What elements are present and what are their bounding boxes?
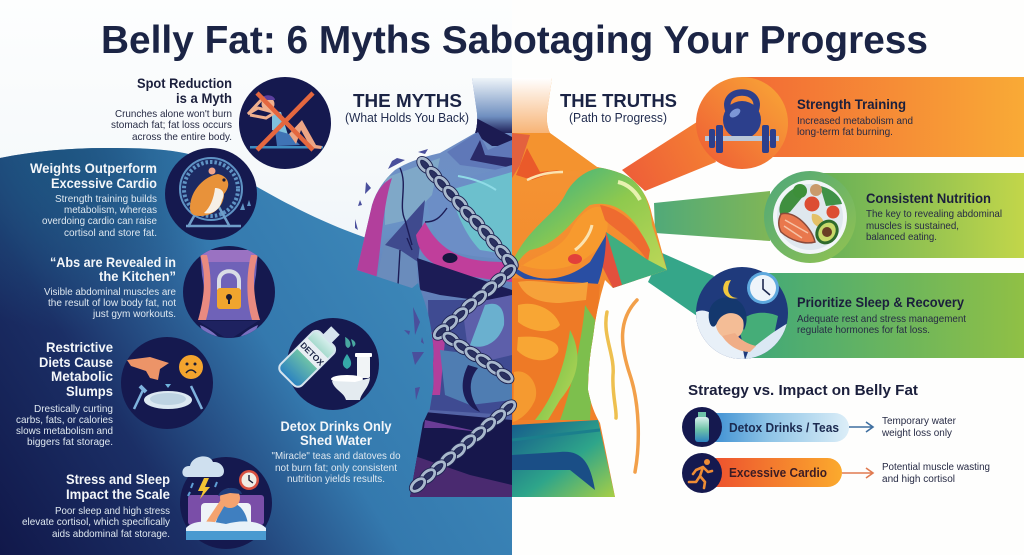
heading: the truths xyxy=(560,90,677,125)
heading: the myths: (What Holds You Back) xyxy=(345,111,469,125)
text: stress and sleep: elevate cortisol, which specifically xyxy=(22,517,171,528)
row: excessive cardio xyxy=(682,453,990,493)
icon: sleeping woman xyxy=(696,267,790,360)
torso: truths half xyxy=(512,78,672,503)
text: weights vs cardio: overdoing cardio can raise xyxy=(42,216,157,227)
text: sleep and recovery xyxy=(797,314,966,336)
icon: detox bottle and toilet xyxy=(277,318,379,410)
heading: the truths: (Path to Progress) xyxy=(569,111,667,125)
text: cardio impact: Potential muscle wasting xyxy=(882,462,990,473)
text: abs in the kitchen: “Abs are Revealed in xyxy=(50,254,176,270)
text: abs in the kitchen: Visible abdominal muscles are xyxy=(44,287,176,298)
heading: consistent nutrition: Consistent Nutrition xyxy=(866,190,991,206)
torso: myths half xyxy=(350,70,515,500)
panel: abs in the kitchen xyxy=(44,246,275,342)
label: excessive cardio: Excessive Cardio xyxy=(729,466,827,480)
text: restrictive diets: Drestically curting xyxy=(34,404,113,415)
text: spot reduction xyxy=(111,75,232,143)
text: strength training: long-term fat burning. xyxy=(797,127,893,138)
text: restrictive diets: Metabolic xyxy=(51,368,113,384)
background: myths side xyxy=(0,0,512,555)
text: cardio impact: and high cortisol xyxy=(882,474,955,485)
ray: strength training xyxy=(622,120,716,191)
icon: energy ribbons xyxy=(606,300,638,472)
text: detox impact xyxy=(881,416,957,439)
icon: shards breaking from torso xyxy=(355,149,428,400)
arrow: detox impact xyxy=(849,422,873,432)
text: stress and sleep: aids abdominal fat storage. xyxy=(52,529,170,540)
text: detox impact: weight loss only xyxy=(881,428,952,439)
icon: empty plate xyxy=(121,337,213,429)
ray: sleep and recovery xyxy=(648,253,714,316)
text: consistent nutrition xyxy=(866,209,1002,243)
text: weights vs cardio: Strength training builds xyxy=(55,194,157,205)
text: detox drinks: Detox Drinks Only xyxy=(280,418,392,434)
row: detox drinks and teas xyxy=(682,407,957,447)
icon: detox bottle and toilet: DETOX xyxy=(298,340,326,368)
text: abs in the kitchen xyxy=(44,254,176,320)
text: weights vs cardio: metabolism, whereas xyxy=(64,205,157,216)
text: restrictive diets: Diets Cause xyxy=(39,354,113,370)
panel: detox drinks xyxy=(272,318,401,485)
text: strength training xyxy=(797,116,913,138)
panel: sleep and recovery xyxy=(696,267,1024,360)
text: abs in the kitchen: just gym workouts. xyxy=(92,309,176,320)
icon: chains xyxy=(409,156,519,494)
title: Belly Fat: 6 Myths Sabotaging Your Progress xyxy=(101,19,928,62)
heading: the myths: THE MYTHS xyxy=(353,90,462,111)
icon: bottle xyxy=(682,407,722,447)
panel: strength training xyxy=(696,77,1024,169)
text: restrictive diets: biggers fat storage. xyxy=(27,437,113,448)
text: restrictive diets xyxy=(16,339,113,448)
icon: crossed-out crunches xyxy=(239,77,331,169)
heading: strength training: Strength Training xyxy=(797,96,906,112)
text: spot reduction: Spot Reduction xyxy=(137,75,232,91)
text: weights vs cardio: cortisol and store fat. xyxy=(64,228,157,239)
text: detox drinks: not burn fat; only consistent xyxy=(275,463,397,474)
icon: kettlebell and barbell xyxy=(696,77,788,169)
text: detox impact: Temporary water xyxy=(882,416,957,427)
text: abs in the kitchen: the result of low body fat, not xyxy=(48,298,176,309)
text: restrictive diets: Restrictive xyxy=(46,339,113,355)
text: spot reduction: Crunches alone won't burn xyxy=(115,109,232,120)
heading: the myths xyxy=(345,90,469,125)
text: restrictive diets: carbs, fats, or calories xyxy=(16,415,113,426)
icon: locked abs xyxy=(183,246,275,342)
text: consistent nutrition: The key to revealing abdominal xyxy=(866,209,1002,220)
icon: hamster wheel xyxy=(165,148,257,240)
text: detox drinks: "Miracle" teas and datoves do xyxy=(272,451,401,462)
text: spot reduction: is a Myth xyxy=(176,90,232,106)
text: weights vs cardio xyxy=(30,160,157,239)
text: stress and sleep: Poor sleep and high stress xyxy=(55,506,170,517)
text: restrictive diets: slows metabolism and xyxy=(16,426,113,437)
panel: weights vs cardio xyxy=(30,148,257,240)
icon: balanced plate xyxy=(764,171,856,263)
panel: consistent nutrition xyxy=(764,171,1024,263)
text: sleep and recovery: regulate hormones for fat loss. xyxy=(797,325,930,336)
background: truths side xyxy=(512,0,1024,555)
text: detox drinks: Shed Water xyxy=(300,432,373,448)
label: detox drinks and teas: Detox Drinks / Teas xyxy=(729,421,839,435)
text: strength training: Increased metabolism and xyxy=(797,116,913,127)
text: stress and sleep: Stress and Sleep xyxy=(66,471,170,487)
ray: consistent nutrition xyxy=(654,191,770,241)
text: abs in the kitchen: the Kitchen” xyxy=(99,268,176,284)
heading: sleep and recovery: Prioritize Sleep & Recovery xyxy=(797,294,964,310)
text: restrictive diets: Slumps xyxy=(66,383,113,399)
text: spot reduction: stomach fat; fat loss occurs xyxy=(111,120,232,131)
text: cardio impact xyxy=(882,462,990,485)
icon: runner xyxy=(682,453,722,493)
heading: the truths: THE TRUTHS xyxy=(560,90,677,111)
text: consistent nutrition: balanced eating. xyxy=(866,232,937,243)
heading: strategy vs impact: Strategy vs. Impact on Belly Fat xyxy=(688,382,918,399)
text: spot reduction: across the entire body. xyxy=(132,132,232,143)
text: weights vs cardio: Weights Outperform xyxy=(30,160,157,176)
panel: restrictive diets xyxy=(16,337,213,448)
panel: stress and sleep xyxy=(22,456,272,549)
background: blue wave xyxy=(0,148,512,555)
text: consistent nutrition: muscles is sustained, xyxy=(866,221,959,232)
icon: stressed sleeper xyxy=(180,456,272,549)
text: sleep and recovery: Adequate rest and stress management xyxy=(797,314,966,325)
arrow: cardio impact xyxy=(842,468,873,478)
text: stress and sleep: Impact the Scale xyxy=(66,486,170,502)
text: detox drinks: nutrition yields results. xyxy=(287,474,385,485)
panel: spot reduction xyxy=(111,75,331,169)
text: detox drinks xyxy=(272,418,401,485)
text: weights vs cardio: Excessive Cardio xyxy=(51,175,157,191)
text: stress and sleep xyxy=(22,471,171,540)
